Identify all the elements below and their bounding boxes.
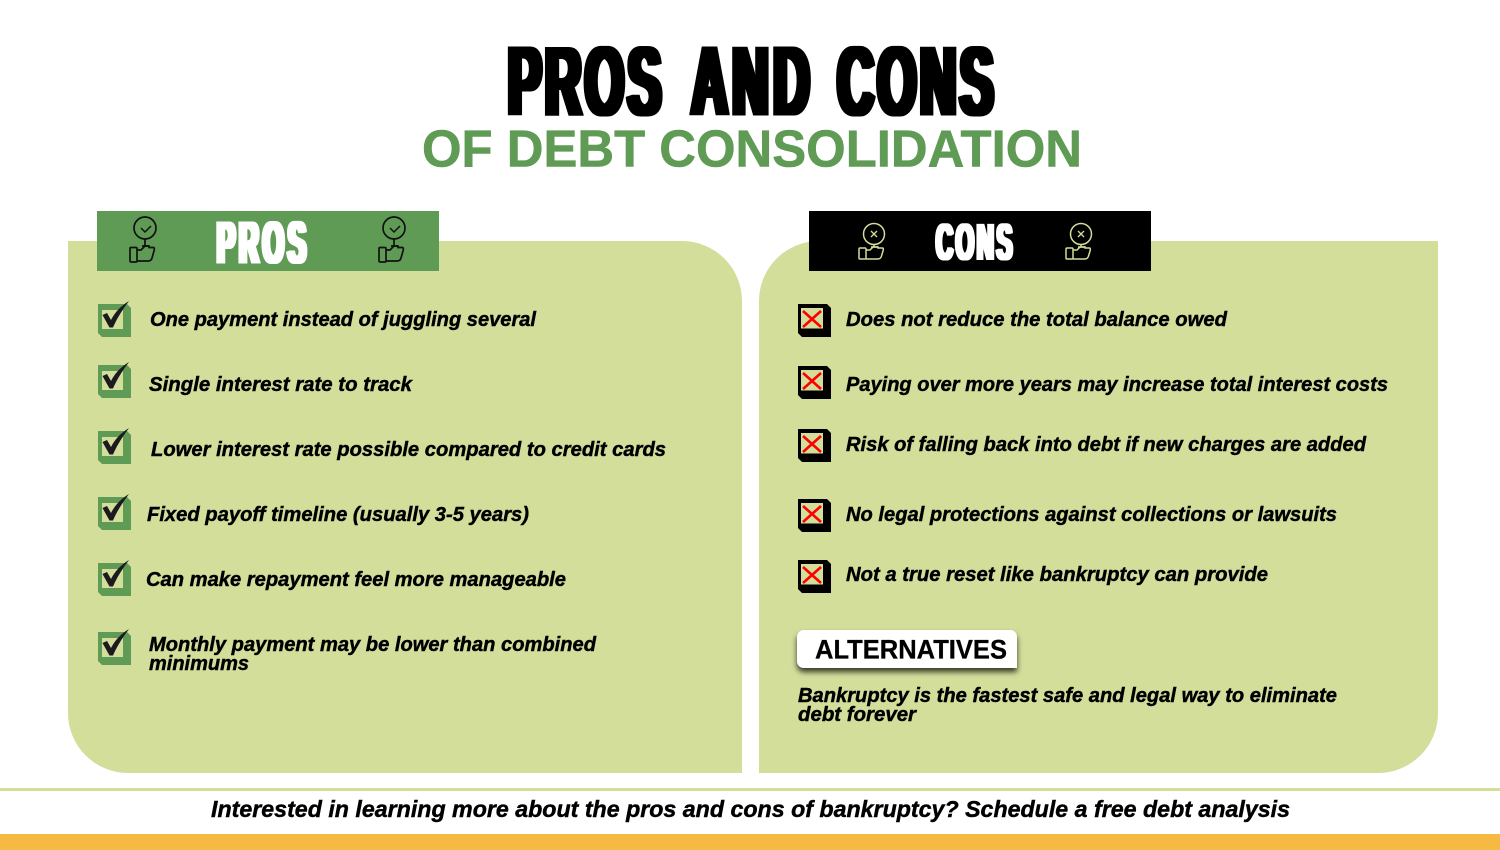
pros list xyxy=(98,301,666,675)
con item 4 xyxy=(798,499,1337,532)
icon: hand holding check left xyxy=(130,217,156,262)
title: pros and cons: AND xyxy=(692,28,814,136)
con item 5 xyxy=(798,560,1268,593)
pro item 5: Can make repayment feel more manageable xyxy=(146,569,566,591)
panel: pros background xyxy=(68,241,742,773)
heading: pros: PROS xyxy=(217,209,310,276)
pro item 4: Fixed payoff timeline (usually 3-5 years) xyxy=(147,504,529,526)
pro item 6: minimums xyxy=(149,653,249,675)
pro item 3 xyxy=(98,428,666,464)
title: pros and cons xyxy=(508,28,997,136)
pro item 1: One payment instead of juggling several xyxy=(150,309,536,331)
alternatives label: ALTERNATIVES xyxy=(815,634,1007,664)
heading: cons: CONS xyxy=(936,215,1015,271)
alternatives text: Bankruptcy is the fastest safe and legal way to eliminate xyxy=(798,685,1337,707)
footer call to action: Interested in learning more about the pros and cons of bankruptcy? Schedule a free debt analysis xyxy=(211,796,1290,822)
footer divider xyxy=(0,788,1500,791)
con item 4: No legal protections against collections or lawsuits xyxy=(846,504,1337,526)
pro item 1 xyxy=(98,301,536,337)
pro item 6 xyxy=(98,629,597,675)
cons list xyxy=(798,304,1388,593)
icon: hand holding cross left xyxy=(859,224,884,259)
pro item 4 xyxy=(98,494,529,530)
pro item 2: Single interest rate to track xyxy=(149,374,413,396)
subtitle: of debt consolidation: OF DEBT CONSOLIDATION xyxy=(422,120,1082,178)
icon: hand holding check right xyxy=(379,217,405,262)
alternatives text xyxy=(798,685,1337,726)
con item 2 xyxy=(798,366,1388,399)
con item 1 xyxy=(798,304,1228,337)
con item 5: Not a true reset like bankruptcy can provide xyxy=(846,564,1268,586)
cons header xyxy=(809,211,1151,271)
pro item 5 xyxy=(98,560,566,596)
pro item 3: Lower interest rate possible compared to credit cards xyxy=(151,439,666,461)
con item 3: Risk of falling back into debt if new charges are added xyxy=(846,434,1367,456)
pro item 2 xyxy=(98,362,413,398)
con item 3 xyxy=(798,429,1367,462)
alternatives text: debt forever xyxy=(798,704,917,726)
panel: cons background xyxy=(759,241,1438,773)
footer orange band xyxy=(0,834,1500,850)
title: pros and cons: CONS xyxy=(838,28,997,136)
con item 2: Paying over more years may increase total interest costs xyxy=(846,374,1388,396)
pros header xyxy=(97,209,439,276)
title: pros and cons: PROS xyxy=(508,28,665,136)
con item 1: Does not reduce the total balance owed xyxy=(846,309,1228,331)
pro item 6: Monthly payment may be lower than combined xyxy=(149,634,597,656)
icon: hand holding cross right xyxy=(1066,224,1092,259)
